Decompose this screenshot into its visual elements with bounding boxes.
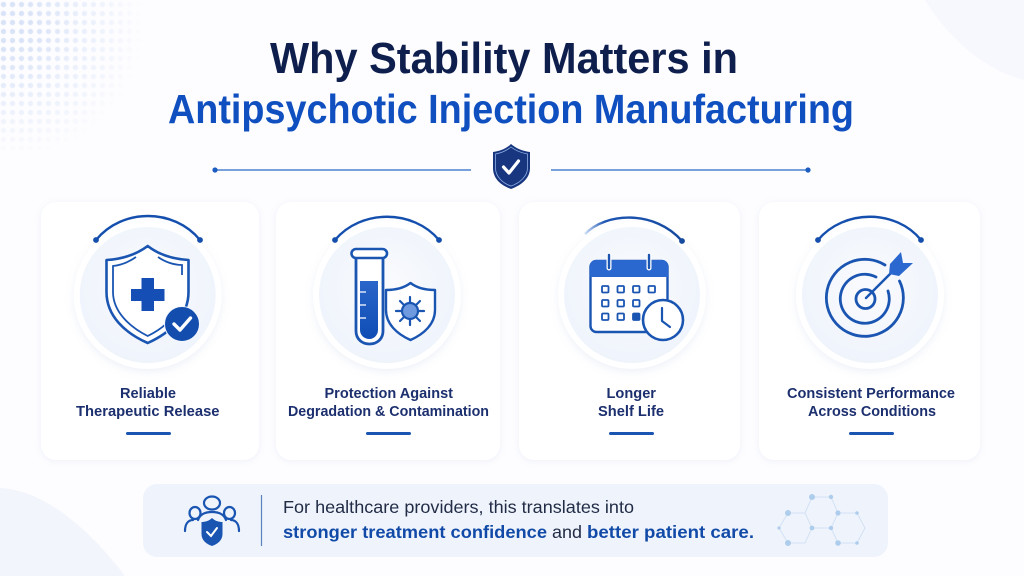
label: Consistent Performance <box>787 386 955 402</box>
underline <box>366 432 411 435</box>
label: Across Conditions <box>808 404 936 420</box>
footer text: For healthcare providers, this translates into <box>283 497 634 517</box>
label <box>598 386 664 420</box>
footer text <box>283 497 754 542</box>
label <box>76 386 220 420</box>
divider with shield <box>212 144 811 189</box>
label <box>288 386 489 420</box>
arc <box>332 217 442 243</box>
footer text: stronger treatment confidence <box>283 522 547 542</box>
decorative dot pattern <box>0 2 119 132</box>
underline <box>849 432 894 435</box>
icon disc <box>74 221 222 369</box>
icon: shield with cross and check <box>106 246 200 343</box>
footer text: better patient care. <box>587 522 754 542</box>
icon disc <box>313 221 461 369</box>
panel: reliable therapeutic release <box>41 202 259 460</box>
arc <box>93 216 203 243</box>
title line 2: Antipsychotic Injection Manufacturing <box>168 86 854 132</box>
callout: footer banner <box>143 484 888 557</box>
icon disc <box>796 221 944 369</box>
molecule decoration <box>777 494 865 546</box>
footer text: and <box>552 522 582 542</box>
label: Longer <box>606 386 656 402</box>
underline <box>126 432 171 435</box>
panel: longer shelf life <box>519 202 740 460</box>
label: Reliable <box>120 386 176 402</box>
title <box>168 34 854 132</box>
arc <box>585 218 685 244</box>
title line 1: Why Stability Matters in <box>270 34 738 83</box>
icon: shield check <box>493 144 530 189</box>
label: Degradation & Contamination <box>288 404 489 420</box>
panel: protection against degradation <box>276 202 500 460</box>
label: Therapeutic Release <box>76 404 220 420</box>
label: Protection Against <box>324 386 453 402</box>
icon: calendar and clock <box>590 255 683 340</box>
icon disc <box>558 221 706 369</box>
background blob: bottom left <box>0 488 125 576</box>
label: Shelf Life <box>598 404 664 420</box>
arc <box>815 217 924 243</box>
icon: people with shield <box>185 496 239 546</box>
divider <box>260 495 262 546</box>
panel: consistent performance <box>759 202 980 460</box>
background blob: top right <box>925 0 1024 80</box>
underline <box>609 432 654 435</box>
icon: test tube and virus shield <box>352 249 435 344</box>
label <box>787 386 955 420</box>
icon: target and arrow <box>826 252 913 336</box>
